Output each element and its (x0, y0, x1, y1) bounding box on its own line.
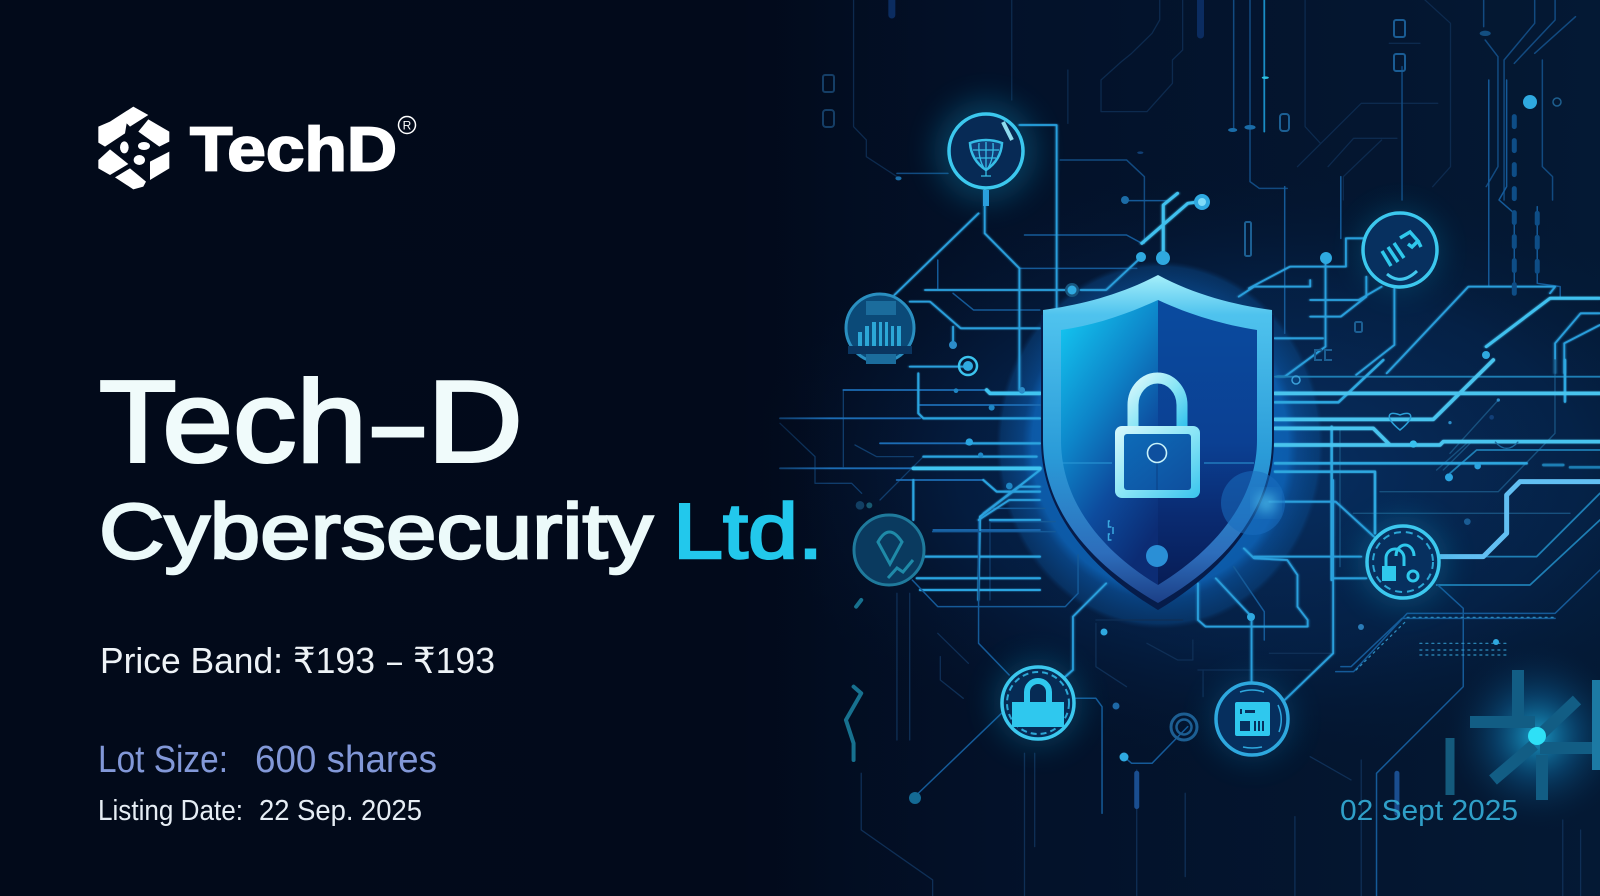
node: location pin (854, 515, 924, 585)
node: server bars (846, 294, 914, 364)
title: D (427, 356, 523, 486)
small technical glyph marks (823, 20, 1405, 360)
price band (100, 640, 495, 681)
lot size (98, 739, 437, 781)
document date: 02 Sept 2025 (1340, 795, 1518, 827)
listing date: Listing Date: (98, 795, 243, 827)
title: Ltd. (673, 487, 823, 575)
price band: ₹193 (413, 640, 495, 681)
circuit traces: left of shield (780, 373, 1040, 600)
title: Tech (99, 356, 367, 486)
icon: hexagon logo mark (98, 107, 169, 189)
node: lock with gauge (1357, 516, 1449, 608)
registered mark: R (403, 118, 412, 132)
ambient glow behind circuit (750, 170, 1600, 770)
small connector dots (909, 95, 1561, 804)
shield bottom dot (1146, 545, 1168, 567)
node: chip code (1358, 208, 1442, 292)
shield right half (1158, 300, 1257, 585)
circuit traces: right of shield (1275, 360, 1600, 585)
keyhole (1148, 444, 1166, 462)
registered mark (398, 116, 416, 134)
title: – (373, 356, 423, 486)
shield with padlock (1041, 275, 1285, 610)
logo (98, 107, 416, 189)
circuit traces: top band (854, 0, 1576, 243)
shield halo (996, 261, 1324, 629)
price band: Price Band: (100, 640, 283, 681)
shield rim (1041, 280, 1274, 610)
price band: – (387, 640, 402, 681)
glow node bottom right (1442, 641, 1600, 831)
lot size: 600 shares (255, 739, 437, 781)
title: Cybersecurity (99, 487, 653, 575)
left fade (720, 0, 830, 896)
title (99, 356, 823, 575)
listing date (98, 795, 422, 827)
padlock body (1115, 426, 1200, 498)
circuit traces: lower (846, 480, 1600, 896)
node: padlock (993, 658, 1083, 748)
padlock shackle (1133, 378, 1182, 428)
node: card (1208, 675, 1296, 763)
listing date: 22 Sep. 2025 (259, 795, 422, 827)
node: globe shield (934, 99, 1038, 206)
logo wordmark: TechD (190, 116, 397, 184)
circuit traces: upper (894, 80, 1600, 390)
lot size: Lot Size: (98, 739, 228, 781)
price band: ₹193 (293, 640, 375, 681)
shield left half (1061, 300, 1158, 585)
